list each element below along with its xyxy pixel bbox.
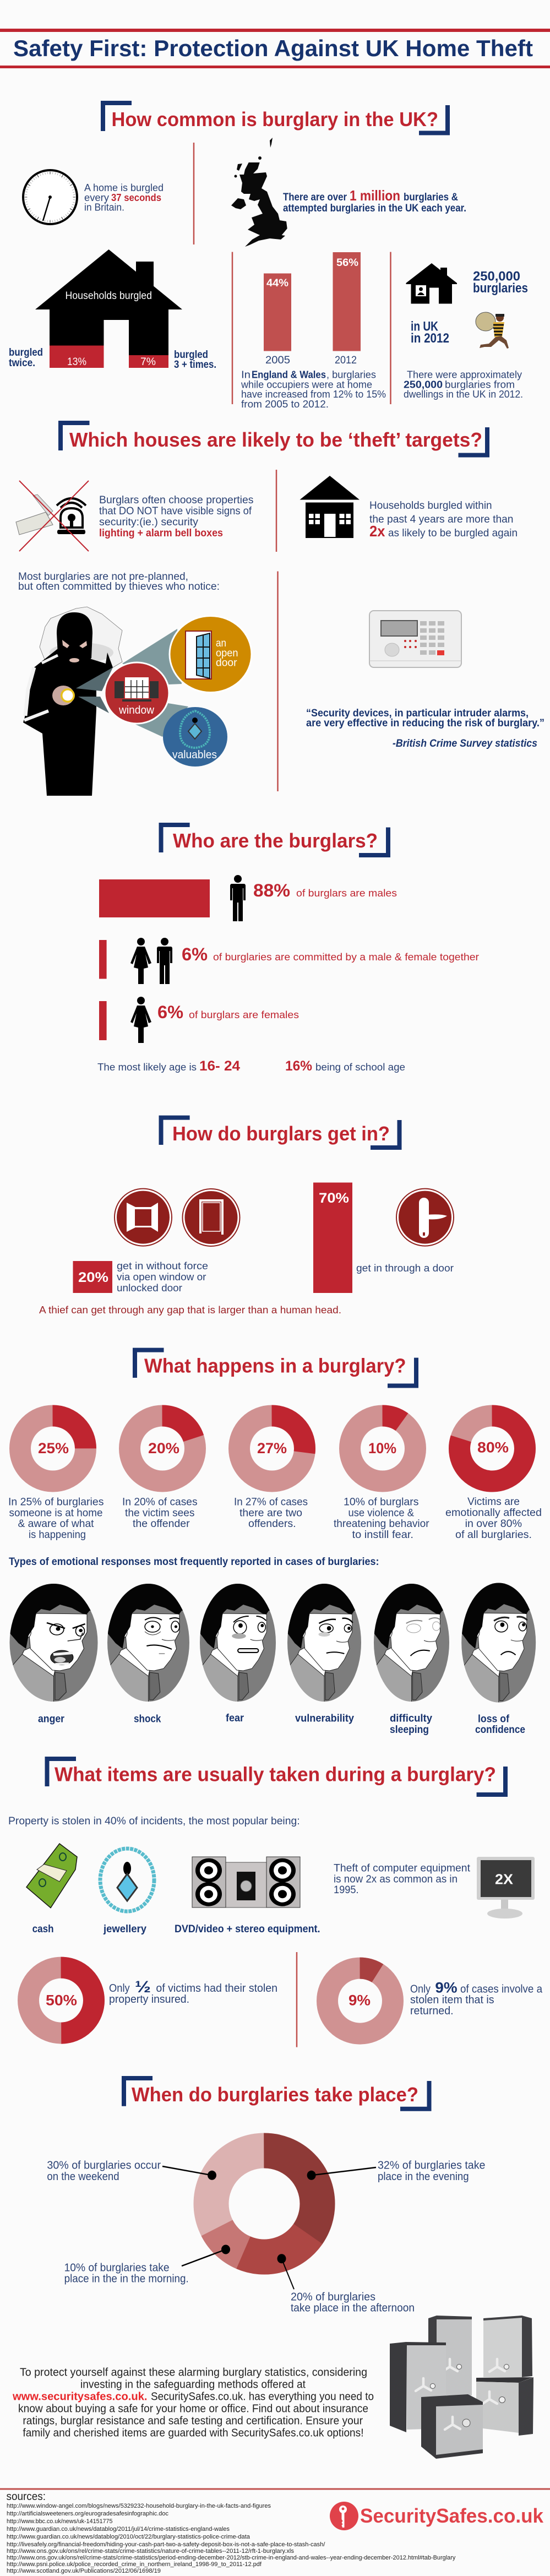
text: burgled 3+ times: 3 + times. xyxy=(174,359,216,371)
text: half insured: Only xyxy=(109,1982,130,1995)
donut text: 80%: Victims are xyxy=(467,1496,520,1508)
icon: house with households burgled: 13% xyxy=(67,356,86,368)
text: England and Wales: England & Wales xyxy=(252,369,326,380)
donut: 50% insured: 50% xyxy=(46,1992,77,2009)
icon: house with households burgled: Households burgled xyxy=(65,290,152,302)
donut: 80% xyxy=(459,1416,525,1481)
donut text: 10% xyxy=(334,1497,429,1541)
text: closing paragraph: ratings, burglar resistance and safe testing and certification. Ensure your xyxy=(23,2415,363,2427)
sources: http://www.ons.gov.uk/ons/rel/crime-stats/crime-statistics/period-ending-december-2012/stb-crime-in-england-and-wales--year-ending-december-2012.html#tab-Burglary xyxy=(7,2555,456,2561)
text: get in through a door: get in through a door xyxy=(356,1263,454,1274)
donut text: 80% xyxy=(445,1496,542,1541)
icon: cash xyxy=(26,1844,77,1908)
stat: 6% together: of burglaries are committed by a male & female together xyxy=(213,952,479,963)
text: in UK in 2012: in UK xyxy=(411,319,439,334)
text: burgled twice: twice. xyxy=(9,357,35,369)
sources: http://www.scotland.gov.uk/Publications/2012/06/1698/19 xyxy=(7,2568,161,2574)
subheading: emotional responses: Types of emotional responses most frequently reported in cases of burglaries: xyxy=(9,1556,379,1568)
text: approximately 250,000: 250,000 xyxy=(404,379,443,390)
callout: an open door: an xyxy=(216,638,226,649)
text: 1 million burglaries: 1 million xyxy=(350,187,400,204)
quote attribution: -British Crime Survey statistics xyxy=(393,738,537,749)
text: computer theft: 1995. xyxy=(334,1884,359,1896)
text: half insured: of victims had their stolen xyxy=(156,1982,277,1995)
donut text: 10%: 10% of burglars xyxy=(344,1497,418,1508)
stat: age: The most likely age is xyxy=(97,1062,197,1073)
donut text: 27% xyxy=(234,1497,308,1530)
donut text: 80%: of all burglaries. xyxy=(455,1529,532,1541)
donut text: 20%: the offender xyxy=(133,1518,190,1530)
text: burgled every 37 seconds: A home is burgled xyxy=(84,182,164,193)
donut: 9% returned xyxy=(327,1968,393,2034)
text: 250,000 burglaries: 250,000 xyxy=(473,269,520,284)
donut: 27% xyxy=(239,1416,305,1481)
text: closing paragraph: know about buying a safe for your home or office. Find out about insurance xyxy=(18,2403,368,2415)
callout line: afternoon xyxy=(277,2254,294,2289)
text: half insured: ½ xyxy=(135,1978,151,1996)
stat: 88% males: of burglars are males xyxy=(296,888,397,899)
text: property stolen: Property is stolen in 40% of incidents, the most popular being: xyxy=(8,1816,300,1827)
icon: house with households burgled xyxy=(35,249,182,368)
donut: 25%: 25% xyxy=(38,1440,69,1457)
text: half insured: property insured. xyxy=(109,1993,189,2006)
text: burgled twice xyxy=(9,347,43,369)
text: approximately 250,000 xyxy=(404,369,523,400)
text: no visible security xyxy=(99,494,253,539)
face: difficulty sleeping xyxy=(373,1582,450,1703)
item labels: DVD/video + stereo equipment. xyxy=(175,1923,320,1935)
stat: 20% without force: unlocked door xyxy=(117,1282,182,1294)
text: burgled 3+ times xyxy=(174,349,216,371)
item labels: cash xyxy=(32,1923,54,1935)
donut text: 20%: In 20% of cases xyxy=(122,1497,198,1508)
text: computer theft: is now 2x as common as in xyxy=(334,1874,458,1885)
stat: 6% females xyxy=(99,997,299,1043)
stat: 20% without force: get in without force xyxy=(117,1260,208,1271)
text: closing paragraph: www.securitysafes.co.uk. xyxy=(12,2390,147,2403)
face: vulnerability xyxy=(286,1582,362,1703)
item labels xyxy=(32,1923,320,1935)
label: evening xyxy=(378,2160,486,2183)
label: morning xyxy=(64,2262,189,2285)
sources xyxy=(7,2491,456,2574)
icon: burglar with sack xyxy=(476,312,509,349)
donut text: 27%: offenders. xyxy=(248,1518,296,1530)
stat: 20% without force xyxy=(73,1260,208,1294)
text: no visible security: lighting + alarm bell boxes xyxy=(99,528,223,539)
quote: security devices xyxy=(306,708,544,749)
label: afternoon: 20% of burglaries xyxy=(291,2291,375,2303)
stat: 6% together: 6% xyxy=(182,944,208,964)
text: 9% returned: of cases involve a xyxy=(460,1983,543,1995)
text: computer theft xyxy=(334,1862,471,1896)
donut: 9% returned: 9% xyxy=(348,1992,371,2009)
stat: age: 16% xyxy=(285,1058,312,1074)
donut text: 10%: threatening behavior xyxy=(334,1518,429,1530)
callout line: evening xyxy=(307,2167,376,2180)
text: burgled every 37 seconds: 37 seconds xyxy=(111,192,161,203)
label: weekend xyxy=(47,2160,161,2183)
heading: who are the burglars xyxy=(161,825,388,855)
face: anger xyxy=(8,1582,99,1703)
donut: 20%: 20% xyxy=(148,1440,179,1457)
face labels: sleeping xyxy=(390,1724,429,1736)
text: 2x as likely: 2x xyxy=(369,523,385,540)
label: weekend: 30% of burglaries occur xyxy=(47,2160,161,2172)
heading: how do burglars get in: How do burglars get in? xyxy=(172,1122,390,1145)
text: burgled every 37 seconds xyxy=(84,182,164,213)
donut text: 80%: in over 80% xyxy=(465,1518,522,1530)
quote: security devices: are very effective in reducing the risk of burglary.” xyxy=(306,718,544,729)
heading: items taken xyxy=(47,1759,505,1795)
donut: 20% xyxy=(130,1416,195,1481)
icon: jewellery xyxy=(100,1849,154,1911)
text: closing paragraph: family and cherished items are guarded with SecuritySafes.co.uk options! xyxy=(23,2427,363,2439)
callout: an open door: door xyxy=(216,657,237,669)
heading: what happens xyxy=(135,1350,416,1385)
face labels: fear xyxy=(226,1713,244,1724)
stat: 6% females: of burglars are females xyxy=(189,1009,299,1020)
text: not pre-planned xyxy=(18,571,220,593)
donut text: 25%: & aware of what xyxy=(18,1518,94,1530)
label: evening: 32% of burglaries take xyxy=(378,2160,486,2172)
text: burgled twice: burgled xyxy=(9,347,43,358)
text: 2x as likely: the past 4 years are more than xyxy=(369,514,513,525)
text: 250,000 burglaries: burglaries xyxy=(473,281,528,296)
label: afternoon xyxy=(291,2291,415,2314)
bar: 70% through a door: 70% xyxy=(319,1191,349,1206)
text: 2x as likely: as likely to be burgled again xyxy=(388,528,518,539)
icon: house with windows xyxy=(299,476,360,538)
callout: an open door: open xyxy=(216,648,238,659)
icon: monitor 2X: 2X xyxy=(495,1871,514,1888)
text: 1 million burglaries: attempted burglaries in the UK each year. xyxy=(283,203,466,214)
sources: http://artificialsweeteners.org/eurogradesafesinfographic.doc xyxy=(7,2510,168,2517)
text: approximately 250,000: burglaries from xyxy=(445,379,515,390)
sources: http://www.bbc.co.uk/news/uk-14151775 xyxy=(7,2518,112,2525)
text: 9% returned: 9% xyxy=(435,1979,458,1996)
icon: clock xyxy=(23,170,77,224)
text: England and Wales: while occupiers were at home xyxy=(241,379,372,390)
icon: door circle xyxy=(183,1189,240,1246)
donut text: 27%: there are two xyxy=(239,1508,302,1519)
donut text: 27%: In 27% of cases xyxy=(234,1497,308,1508)
face labels: vulnerability xyxy=(295,1713,354,1725)
sources: http://www.guardian.co.uk/news/datablog/2010/oct/22/burglary-statistics-police-crime-data xyxy=(7,2534,251,2540)
bar: 70% through a door xyxy=(313,1183,352,1293)
text: closing paragraph: investing in the safeguarding methods offered at xyxy=(80,2378,306,2390)
face labels: shock xyxy=(134,1714,161,1725)
icon: UK map xyxy=(231,138,287,247)
stat: 20% without force: via open window or xyxy=(117,1271,206,1282)
donut text: 25%: is happening xyxy=(29,1529,86,1541)
callout line: morning xyxy=(182,2245,230,2266)
sources: http://livesafely.org/financial-freedom/hiding-your-cash-part-two-a-safety-deposit-box-is-not-a-safe-place-to-stash-cash/ xyxy=(7,2541,325,2548)
text: England and Wales: from 2005 to 2012. xyxy=(241,399,329,410)
text: closing paragraph: SecuritySafes.co.uk. has everything you need to xyxy=(151,2390,374,2403)
donut text: 25%: In 25% of burglaries xyxy=(8,1497,104,1508)
bar chart: burglaries while occupiers at home: 2005 xyxy=(265,355,290,366)
heading: theft targets: Which houses are likely to be ‘theft’ targets? xyxy=(69,428,482,451)
icon: door handle circle xyxy=(396,1189,454,1246)
icon: small house xyxy=(406,263,457,304)
face: fear xyxy=(199,1582,277,1703)
heading: what happens: What happens in a burglary? xyxy=(144,1355,406,1377)
bar chart: burglaries while occupiers at home xyxy=(264,252,361,366)
text: burgled every 37 seconds: in Britain. xyxy=(84,202,124,213)
heading: theft targets xyxy=(61,423,487,455)
donut: 27%: 27% xyxy=(257,1440,287,1457)
quote: security devices: “Security devices, in particular intruder alarms, xyxy=(306,708,529,719)
label: morning: place in the in the morning. xyxy=(64,2273,189,2285)
text: burgled every 37 seconds: every xyxy=(84,192,109,203)
text: not pre-planned: but often committed by thieves who notice: xyxy=(18,581,220,593)
face labels xyxy=(38,1713,525,1736)
text: no visible security: Burglars often choose properties xyxy=(99,494,253,506)
text: no visible security: security:(ie.) security xyxy=(99,517,199,528)
text: half insured xyxy=(109,1978,277,2006)
donut text: 20% xyxy=(122,1497,198,1530)
callout: window xyxy=(104,662,170,725)
text: in UK in 2012: in 2012 xyxy=(411,331,449,346)
face labels: difficulty xyxy=(390,1713,432,1725)
sources: sources: xyxy=(7,2491,46,2503)
donut: 50% insured xyxy=(29,1968,94,2033)
label: morning: 10% of burglaries take xyxy=(64,2262,170,2274)
logo: SecuritySafes.co.uk xyxy=(330,2502,544,2530)
text: England and Wales xyxy=(241,369,386,410)
stat: 20% without force: 20% xyxy=(78,1270,108,1285)
sources: http://www.window-angel.com/blogs/news/5329232-household-burglary-in-the-uk-facts-and-figures xyxy=(7,2503,271,2509)
donut text: 20%: the victim sees xyxy=(125,1508,195,1519)
donut text: 25% xyxy=(8,1497,104,1541)
text: computer theft: Theft of computer equipment xyxy=(334,1862,471,1874)
text: 250,000 burglaries xyxy=(473,269,528,296)
text: closing paragraph: To protect yourself against these alarming burglary statistics, considering xyxy=(20,2366,367,2378)
icon: alarm panel xyxy=(369,611,461,667)
sources: http://www.guardian.co.uk/news/datablog/2011/jul/14/crime-statistics-england-wales xyxy=(7,2526,230,2532)
text: approximately 250,000: There were approximately xyxy=(407,369,522,380)
face labels: anger xyxy=(38,1714,65,1725)
donut: 10% xyxy=(350,1416,415,1481)
face: loss of confidence xyxy=(460,1581,537,1704)
bar chart: burglaries while occupiers at home: 56% xyxy=(336,257,358,269)
callout: valuables: valuables xyxy=(172,749,217,761)
text: no visible security: that DO NOT have visible signs of xyxy=(99,506,252,517)
text: approximately 250,000: dwellings in the UK in 2012. xyxy=(404,389,523,400)
label: weekend: on the weekend xyxy=(47,2171,119,2183)
donut chart: time of burglaries xyxy=(162,2130,376,2289)
icon: window circle xyxy=(115,1189,172,1246)
text: England and Wales: In xyxy=(241,369,251,380)
label: evening: place in the evening xyxy=(378,2171,469,2183)
text: burgled 3+ times: burgled xyxy=(174,349,208,361)
face labels: confidence xyxy=(475,1724,525,1736)
text: 1 million burglaries: burglaries & xyxy=(404,192,458,203)
callout: window: window xyxy=(118,704,155,716)
icon: crossed-out camera and alarm xyxy=(16,481,89,551)
text: 9% returned: Only xyxy=(410,1983,431,1995)
text: 9% returned: stolen item that is xyxy=(410,1994,494,2006)
text: 9% returned xyxy=(410,1979,543,2017)
heading: who are the burglars: Who are the burglars? xyxy=(173,829,378,852)
illustration: masked burglar with torch xyxy=(23,607,188,796)
item labels: jewellery xyxy=(103,1923,146,1935)
bar chart: burglaries while occupiers at home: 2012 xyxy=(335,355,357,366)
donut text: 80%: emotionally affected xyxy=(445,1507,542,1519)
donut text: 10%: to instill fear. xyxy=(352,1529,413,1541)
title: Safety First: Protection Against UK Home Theft xyxy=(13,35,533,61)
stat: 88% males xyxy=(99,875,397,921)
title banner xyxy=(0,29,550,68)
logo: SecuritySafes.co.uk: SecuritySafes.co.uk xyxy=(360,2504,544,2527)
face labels: loss of xyxy=(478,1714,510,1725)
donut text: 10%: use violence & xyxy=(348,1508,414,1519)
text: England and Wales: , burglaries xyxy=(326,369,376,380)
heading: items taken: What items are usually taken during a burglary? xyxy=(55,1763,496,1785)
callout: an open door xyxy=(168,615,252,693)
text: England and Wales: have increased from 12% to 15% xyxy=(241,389,386,400)
sources: http://www.psni.police.uk/police_recorded_crime_in_northern_ireland_1998-99_to_2011-12.pdf xyxy=(7,2561,262,2568)
text: 1 million burglaries: There are over xyxy=(283,192,347,203)
label: afternoon: take place in the afternoon xyxy=(291,2302,415,2314)
text: in UK in 2012 xyxy=(411,319,449,346)
text: 9% returned: returned. xyxy=(410,2005,454,2017)
stat: age: being of school age xyxy=(315,1062,405,1073)
stat: 6% females: 6% xyxy=(157,1002,183,1022)
illustration: safes xyxy=(390,2316,533,2459)
stat: 6% together xyxy=(99,938,479,984)
text: 1 million burglaries xyxy=(283,187,466,214)
text: thief gap note: A thief can get through any gap that is larger than a human head. xyxy=(39,1305,341,1316)
icon: stereo xyxy=(192,1857,300,1907)
text: 2x as likely xyxy=(369,500,518,540)
callout: valuables xyxy=(163,707,227,767)
callout line: weekend xyxy=(162,2166,216,2180)
sources: http://www.ons.gov.uk/ons/rel/crime-stats/crime-statistics/nature-of-crime-tables--2011-12/rft-1-burglary.xls xyxy=(7,2548,294,2555)
stat: 88% males: 88% xyxy=(253,881,290,900)
text: closing paragraph xyxy=(12,2366,374,2439)
bar chart: burglaries while occupiers at home: 44% xyxy=(266,278,288,289)
icon: house with households burgled: 7% xyxy=(140,356,156,368)
stat: age: 16- 24 xyxy=(199,1058,240,1074)
donut text: 25%: someone is at home xyxy=(9,1508,102,1519)
stat: age xyxy=(97,1058,405,1074)
heading: how common: How common is burglary in the UK? xyxy=(111,108,438,131)
text: 2x as likely: Households burgled within xyxy=(369,500,492,512)
donut: 10%: 10% xyxy=(368,1440,396,1457)
heading: when: When do burglaries take place? xyxy=(132,2083,418,2106)
icon: monitor 2X xyxy=(477,1857,535,1919)
face: shock xyxy=(106,1582,190,1703)
donut: 25% xyxy=(20,1416,86,1481)
text: not pre-planned: Most burglaries are not pre-planned, xyxy=(18,571,188,583)
donut: 80%: 80% xyxy=(477,1439,509,1456)
